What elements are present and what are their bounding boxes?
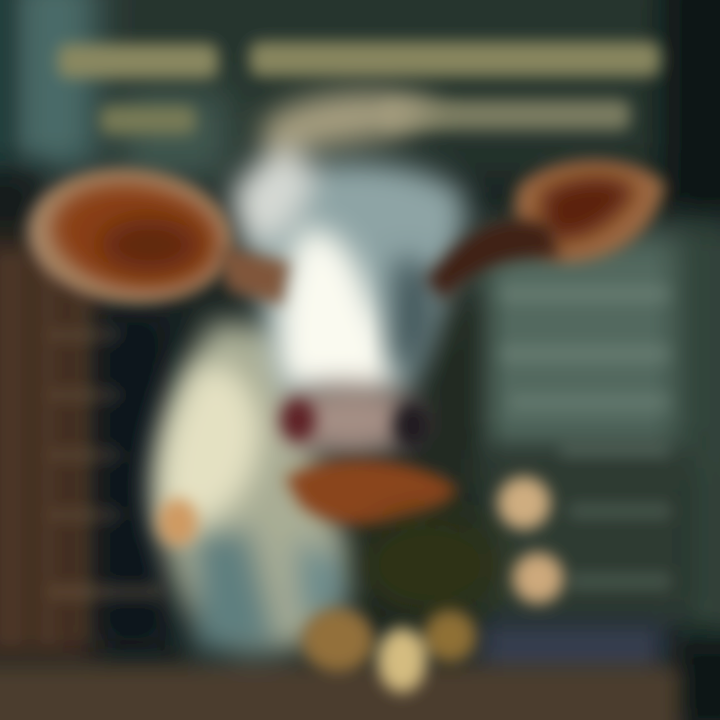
wood plank stripes, left column [0, 255, 89, 645]
calf shoulder tan patch [158, 498, 198, 546]
calf white blaze [278, 228, 392, 395]
dark green shadow under muzzle [360, 515, 500, 615]
calf head [230, 92, 465, 395]
calf chest highlight [159, 364, 262, 530]
calf muzzle [280, 384, 458, 525]
illustration: calf [23, 92, 665, 692]
right ear [425, 161, 665, 300]
heading: blurred title bands [58, 42, 660, 134]
left ear [23, 161, 290, 311]
right column text bands [500, 285, 670, 587]
golden feed pile [302, 608, 476, 692]
left column text bands [50, 330, 160, 599]
calf neck and body [156, 320, 353, 655]
calf dark cheek [390, 258, 434, 385]
bullet markers [498, 477, 563, 603]
